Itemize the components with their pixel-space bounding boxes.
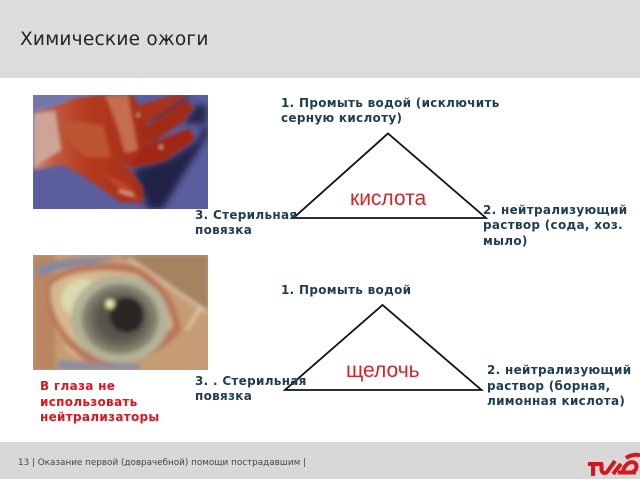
warning note: В глаза не bbox=[40, 379, 115, 393]
step 3 label: повязка bbox=[195, 389, 252, 403]
step 3 label bbox=[195, 374, 307, 403]
title: Химические ожоги bbox=[20, 29, 209, 50]
step 3 label: повязка bbox=[195, 223, 252, 237]
step 2 label: лимонная кислота) bbox=[487, 394, 625, 408]
step 2 label: 2. нейтрализующий bbox=[487, 363, 631, 377]
step 1 label bbox=[281, 96, 500, 125]
step 3 label: 3. . Стерильная bbox=[195, 374, 307, 388]
triangle label: щелочь bbox=[346, 359, 420, 382]
step 2 label: 2. нейтрализующий bbox=[483, 202, 627, 216]
step 2 label: мыло) bbox=[483, 234, 528, 248]
step 3 label: 3. Стерильная bbox=[195, 208, 297, 222]
triangle outline bbox=[292, 132, 488, 219]
warning note bbox=[40, 379, 160, 424]
photo: burned hand bbox=[33, 95, 208, 209]
warning note: нейтрализаторы bbox=[40, 410, 160, 424]
step 1 label: 1. Промыть водой (исключить bbox=[281, 96, 500, 110]
diagram: acid triangle bbox=[195, 96, 627, 248]
step 2 label bbox=[483, 202, 627, 248]
header band bbox=[0, 0, 640, 78]
diagram: alkali triangle bbox=[195, 282, 631, 408]
triangle label: кислота bbox=[350, 187, 426, 210]
step 1 label: 1. Промыть водой bbox=[281, 282, 411, 296]
footer band bbox=[0, 442, 640, 479]
step 1 label: серную кислоту) bbox=[281, 111, 402, 125]
step 2 label: раствор (борная, bbox=[487, 378, 611, 392]
photo: injured eye bbox=[33, 255, 208, 370]
step 3 label bbox=[195, 208, 297, 237]
logo: RZD bbox=[588, 452, 640, 476]
triangle outline bbox=[282, 304, 484, 391]
footer text: 13 | Оказание первой (доврачебной) помощи пострадавшим | bbox=[18, 458, 306, 468]
step 2 label bbox=[487, 363, 631, 408]
step 2 label: раствор (сода, хоз. bbox=[483, 218, 623, 232]
warning note: использовать bbox=[40, 394, 138, 408]
